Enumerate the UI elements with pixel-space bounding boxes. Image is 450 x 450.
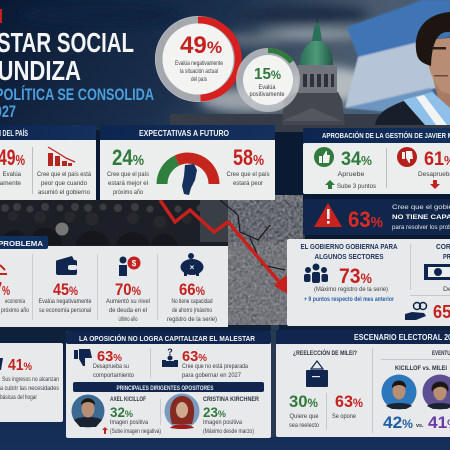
- panel: the problem: su economía personal: [39, 308, 91, 314]
- photo: Kicillof: [382, 374, 416, 410]
- stat: 66%: 66%: [179, 280, 205, 299]
- background: crowd: [0, 200, 290, 250]
- leader: Kicillof: 32%: [110, 404, 134, 420]
- leader: Kicillof: (Sube imagen negativa): [110, 429, 161, 435]
- panel: electoral scenario: sea reelecto: [289, 423, 320, 429]
- panel: the problem: registro de la serie): [167, 317, 217, 323]
- panel: government approval: Desaprueba: [418, 172, 450, 178]
- red falling arrow: [160, 200, 291, 296]
- panel: future expectations: Cree que el país: [226, 172, 270, 178]
- panel: electoral scenario: Quiere que: [290, 414, 319, 420]
- icon: people with question mark: ?: [167, 347, 173, 357]
- panel: future expectations: estará peor: [233, 181, 263, 187]
- title: [0, 9, 154, 121]
- panel: the problem: Aumentó su nivel: [106, 299, 150, 305]
- panel: future expectations: estará mejor el: [108, 181, 148, 187]
- panel: opposition: comportamiento: [93, 373, 135, 379]
- stat: 42% vs 41%: 42%: [383, 413, 413, 432]
- panel heading: expectations: EXPECTATIVAS A FUTURO: [139, 128, 229, 138]
- stat: 70%: 70%: [115, 280, 141, 299]
- panel: government for some sectors: [287, 239, 450, 326]
- stat: 41%: 41%: [8, 357, 32, 374]
- callout: 49% ring: [155, 16, 241, 102]
- panel: the problem: de ahorro (máximo: [172, 308, 213, 314]
- background: cracked ground: [200, 195, 305, 330]
- icon: up arrow: [325, 180, 335, 189]
- callout: 15% ring: [236, 48, 300, 112]
- stat: 63% not prepared: 63%: [182, 348, 207, 365]
- icon: warning triangle: [314, 203, 342, 227]
- leader: Kicillof: AXEL KICILLOF: [110, 397, 146, 403]
- panel: government approval: [303, 128, 450, 194]
- panel: government for some sectors: ALGUNOS SECTORES: [314, 254, 384, 261]
- panel: the problem: de deuda en el: [109, 308, 147, 314]
- panel: income not enough: [0, 343, 63, 422]
- background: argentine flag: [345, 0, 450, 113]
- panel: the problem: economía: [5, 299, 25, 305]
- subheading: opposition leaders: [73, 382, 264, 392]
- callout: 15% ring: positivamente: [250, 92, 285, 98]
- panel: the problem: último año: [118, 317, 138, 323]
- leader: Kirchner: CRISTINA KIRCHNER: [203, 397, 260, 403]
- stat: 24%: 24%: [112, 145, 144, 170]
- stat: 63%: 63%: [348, 207, 383, 232]
- callout: 15% ring: 15%: [254, 66, 281, 83]
- icon: banknotes: [424, 264, 450, 280]
- photo: Axel Kicillof: [72, 394, 104, 428]
- panel: situation of the country: [0, 125, 96, 200]
- panel: electoral scenario: [276, 330, 450, 437]
- panel: the problem: [0, 236, 228, 327]
- panel: opposition: Desaprueba su: [93, 364, 129, 370]
- stat: 63% oppose: 63%: [335, 392, 363, 411]
- panel: government approval: Sube 3 puntos: [337, 184, 376, 190]
- icon: person with debt: $: [132, 259, 137, 268]
- panel: situation of the country: peor que cuando: [41, 181, 88, 187]
- leader: Kirchner: 23%: [203, 404, 227, 420]
- background: stormy sky: [0, 0, 450, 130]
- background: congress building: [170, 13, 450, 132]
- panel: the problem: próximo año: [1, 308, 30, 314]
- panel: future expectations: Cree que el país: [107, 172, 149, 178]
- callout: 49% ring: del país: [191, 77, 207, 83]
- panel: opposition: Cree que no está preparada: [182, 364, 249, 370]
- stat: 30%: 30%: [289, 392, 318, 411]
- icon: people with question mark: [162, 347, 178, 367]
- leader: Kirchner: (Máximo desde marzo): [203, 429, 254, 435]
- panel: the problem: Evalúa negativamente: [38, 299, 92, 305]
- stat: 58%: 58%: [233, 145, 264, 170]
- panel: future expectations: [100, 125, 275, 200]
- callout: 49% ring: la situación actual: [180, 69, 218, 75]
- leader: Kirchner: Imagen positiva: [203, 420, 243, 426]
- icon: hand with money: [405, 302, 426, 320]
- icon: person with debt: [119, 256, 140, 276]
- panel: electoral scenario: Se opone: [332, 414, 357, 420]
- panel: opposition: [66, 331, 271, 438]
- panel: government for some sectors: (Máximo registro de la serie): [314, 287, 388, 293]
- icon: wallet: [56, 256, 77, 275]
- icon: basket: [0, 358, 3, 370]
- stat: 45%: 45%: [53, 280, 78, 299]
- icon: down arrow: [430, 180, 440, 189]
- stat: 63% disapprove: 63%: [97, 348, 122, 365]
- subheading: opposition leaders: PRINCIPALES DIRIGENTES OPOSITORES: [116, 386, 214, 392]
- subheading: reelection: ¿REELECCIÓN DE MILEI?: [293, 349, 357, 357]
- icon: piggy bank: ×: [190, 263, 195, 272]
- panel: electoral scenario: KICILLOF vs. MILEI: [395, 366, 447, 372]
- leader: Kicillof: [102, 397, 161, 435]
- callout: 15% ring: Evalúa: [258, 85, 276, 91]
- icon: piggy bank: [180, 253, 204, 276]
- stat: 34%: 34%: [341, 149, 372, 170]
- portrait: Javier Milei: [375, 12, 450, 125]
- icon: falling bars: [48, 147, 75, 166]
- callout: 49% ring: 49%: [180, 32, 222, 59]
- panel: situation of the country: asumió el gobierno: [38, 190, 91, 196]
- icon: thumbs up: [314, 147, 334, 167]
- icon: thumbs down: [397, 147, 417, 167]
- panel: government for some sectors: + 9 puntos respecto del mes anterior: [304, 297, 395, 303]
- photo: Cristina Kirchner: [164, 394, 200, 429]
- callout: no capacity banner: [303, 199, 450, 235]
- icon: ballot box: [306, 361, 328, 387]
- gauge chart: [162, 158, 214, 184]
- panel: income not enough: Sus ingresos no alcanzan: [2, 377, 59, 383]
- leader: Kicillof: Imagen positiva: [110, 420, 149, 426]
- panel: income not enough: básicas del hogar: [0, 395, 37, 401]
- panel: future expectations: próximo año: [113, 190, 144, 196]
- background: bottom band: [0, 325, 450, 450]
- panel heading: opposition: LA OPOSICIÓN NO LOGRA CAPITALIZAR EL MALESTAR: [79, 334, 256, 343]
- stat: 73%: 73%: [339, 265, 373, 288]
- panel: opposition: para gobernar en 2027: [182, 373, 242, 379]
- icon: thumbs down: [74, 349, 92, 366]
- stat: 42% vs 41%: [383, 413, 450, 432]
- panel: government approval: Apruebe: [338, 172, 365, 178]
- panel: situation of the country: Evalúa: [3, 172, 22, 178]
- photo: Milei: [422, 374, 450, 410]
- leader: Kirchner: [203, 397, 260, 435]
- icon: map of Argentina: [182, 164, 197, 195]
- panel: the problem: No tiene capacidad: [172, 299, 212, 305]
- icon: people group: [304, 264, 328, 283]
- panel heading: some sectors: EL GOBIERNO GOBIERNA PARA: [300, 244, 398, 251]
- callout: 49% ring: Evalúa negativamente: [175, 61, 224, 67]
- stat: 42% vs 41%: vs.: [416, 423, 424, 429]
- panel: situation of the country: Cree que el país está: [37, 172, 92, 178]
